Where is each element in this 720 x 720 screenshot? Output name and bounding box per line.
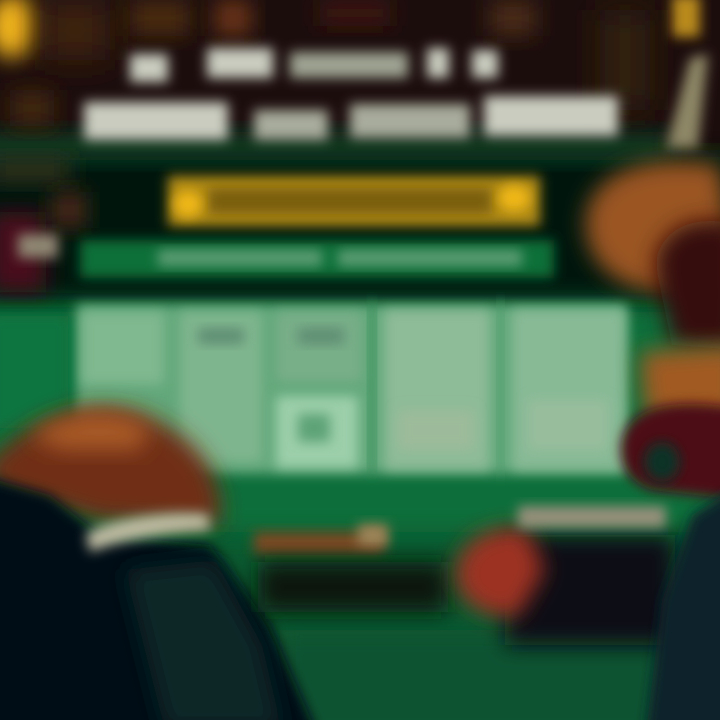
top right pale stick <box>666 54 708 148</box>
highlighted centre mark <box>298 414 330 442</box>
table cell column 3 <box>276 312 362 382</box>
background lights and warm bokeh <box>0 0 700 126</box>
table text hints <box>198 328 244 344</box>
table cell column 5 <box>512 310 624 470</box>
green banner <box>80 240 554 278</box>
table cell column 1 <box>82 312 164 384</box>
left green felt <box>0 316 68 428</box>
gold banner <box>168 176 540 226</box>
left arm with hand and cuff <box>0 407 320 720</box>
table cell column 2 <box>180 312 262 462</box>
column gaps <box>369 302 375 474</box>
table cell column 3 lower <box>276 396 358 468</box>
table grid <box>76 302 628 474</box>
right hand with cuff <box>455 506 675 645</box>
right figure: raised fist and arm <box>586 161 720 720</box>
centre objects on the table <box>254 524 448 612</box>
title <box>84 48 618 140</box>
left edge: blurred objects <box>0 158 86 292</box>
table cell column 4 <box>384 310 490 470</box>
